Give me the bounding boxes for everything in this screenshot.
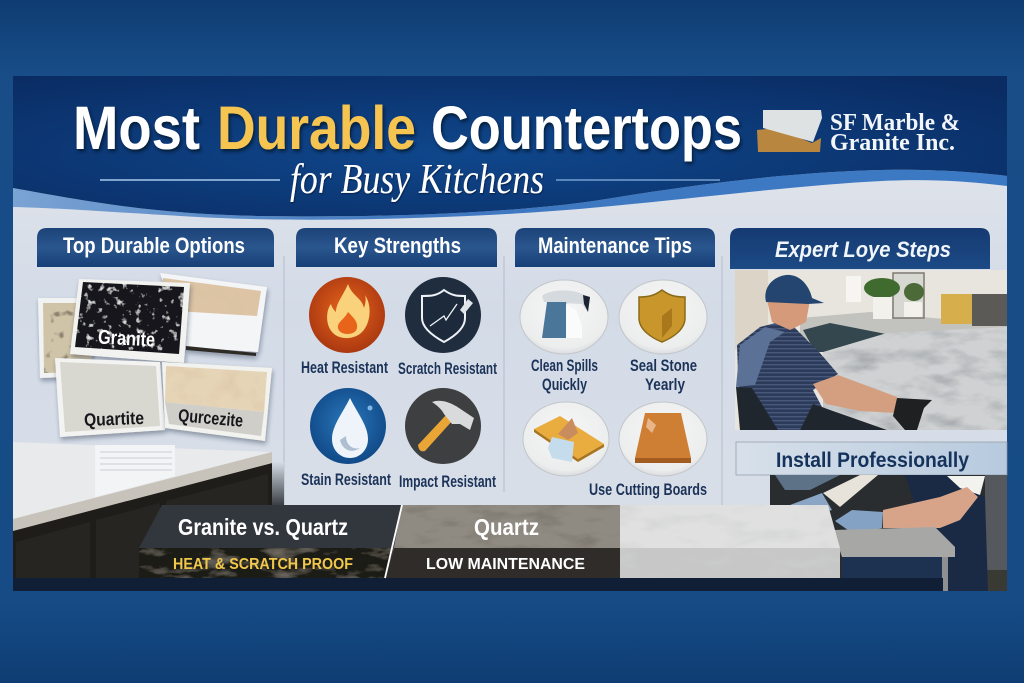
kitchen counter — [13, 442, 284, 591]
header banner — [13, 76, 1007, 220]
logo — [757, 110, 960, 156]
cap — [765, 275, 824, 304]
white sleeve — [947, 476, 985, 495]
label: clean spills quickly: Clean Spills — [531, 356, 598, 375]
label: impact resistant: Impact Resistant — [399, 472, 496, 491]
title — [73, 94, 742, 162]
photo: hands on counter — [770, 475, 1007, 591]
quartz label: Quartz — [474, 514, 539, 540]
icon: flame — [309, 277, 385, 353]
quartite label: Quartite — [84, 408, 144, 430]
left sleeve — [823, 475, 878, 507]
marble segment — [620, 505, 840, 578]
quartzite tan card — [162, 362, 272, 441]
company name — [830, 110, 960, 156]
label: stain resistant: Stain Resistant — [301, 470, 391, 489]
subtitle left rule — [100, 179, 280, 181]
counter edge — [13, 452, 272, 531]
granite label: Granite — [98, 326, 156, 351]
title: Most — [73, 94, 200, 162]
icon: gold shield — [619, 280, 707, 354]
quartz segment — [385, 505, 620, 578]
icon: cutting board — [619, 402, 707, 476]
far-left stone card — [38, 298, 92, 378]
counter top — [13, 442, 272, 519]
column dividers — [284, 256, 722, 505]
heading: Top Durable Options — [63, 233, 245, 258]
granite countertop — [823, 327, 1007, 430]
panel: expert steps — [730, 228, 1007, 591]
outlet panel — [846, 276, 861, 302]
upper-right stone card — [160, 273, 267, 356]
lower backdrop — [770, 475, 1007, 578]
label: seal stone yearly: Yearly — [645, 375, 685, 394]
countertop back — [800, 312, 1007, 340]
photo: worker at granite counter — [735, 270, 1007, 430]
blue-grey torso behind — [775, 475, 840, 490]
label: clean spills quickly — [531, 356, 598, 394]
company name: Granite Inc. — [830, 130, 955, 156]
panel: key strengths — [296, 228, 497, 491]
forearm — [883, 487, 978, 528]
icon: sealer brush — [523, 402, 609, 476]
plants — [864, 278, 924, 319]
label: seal stone yearly — [630, 356, 697, 394]
sink — [803, 323, 886, 352]
subtitle text: for Busy Kitchens — [290, 157, 544, 203]
icon: hammer — [405, 388, 481, 464]
wave accent band — [13, 170, 1007, 220]
worker navy torso — [905, 475, 988, 591]
heading: Maintenance Tips — [538, 233, 692, 258]
qurcezite label: Qurcezite — [177, 405, 244, 431]
cabinets — [13, 463, 272, 591]
main card background — [13, 76, 1007, 591]
label: clean spills quickly: Quickly — [542, 375, 587, 394]
heading: Expert Loye Steps — [775, 237, 951, 262]
panel: top durable options — [13, 228, 284, 591]
worker body — [737, 320, 880, 430]
subtitle right rule — [556, 179, 720, 181]
heading — [730, 228, 990, 269]
counter reflection — [95, 445, 175, 497]
head — [767, 300, 810, 330]
bottom edge band — [13, 578, 943, 591]
title: Countertops — [431, 94, 742, 162]
title: Durable — [217, 94, 416, 162]
stacked samples — [941, 294, 1007, 326]
divider slash — [385, 505, 402, 578]
granite segment — [139, 505, 402, 578]
label: scratch resistant: Scratch Resistant — [398, 359, 497, 378]
granite card — [70, 279, 190, 363]
counter piece — [833, 527, 955, 557]
heading: Key Strengths — [334, 233, 461, 258]
black glove — [893, 398, 932, 430]
label: use cutting boards: Use Cutting Boards — [589, 480, 707, 499]
granite vs quartz label: Granite vs. Quartz — [178, 514, 348, 540]
apron strap back — [736, 327, 785, 387]
heat and scratch proof label: HEAT & SCRATCH PROOF — [173, 556, 353, 573]
panel: maintenance tips — [515, 228, 715, 499]
heading — [515, 228, 715, 267]
label: seal stone yearly: Seal Stone — [630, 356, 697, 375]
quartzite card — [55, 358, 165, 437]
arm — [813, 375, 897, 413]
right glove — [835, 510, 883, 535]
icon: shield scratch — [405, 277, 481, 353]
kitchen wall — [735, 270, 1007, 430]
left glove — [782, 493, 832, 518]
shelf — [893, 273, 924, 318]
icon: water drop — [310, 388, 386, 464]
install professionally strip: Install Professionally — [776, 449, 969, 472]
company name: SF Marble & — [830, 110, 960, 136]
heading — [37, 228, 274, 267]
comparison slab — [139, 505, 840, 578]
label: heat resistant: Heat Resistant — [301, 358, 388, 377]
install professionally strip — [736, 442, 1007, 475]
base — [842, 557, 942, 591]
banner fill — [13, 76, 1007, 216]
icon: stone slabs — [757, 110, 822, 152]
heading — [296, 228, 497, 267]
icon: spray bottle — [520, 280, 608, 354]
low maintenance label: LOW MAINTENANCE — [426, 556, 585, 573]
apron — [736, 387, 887, 430]
